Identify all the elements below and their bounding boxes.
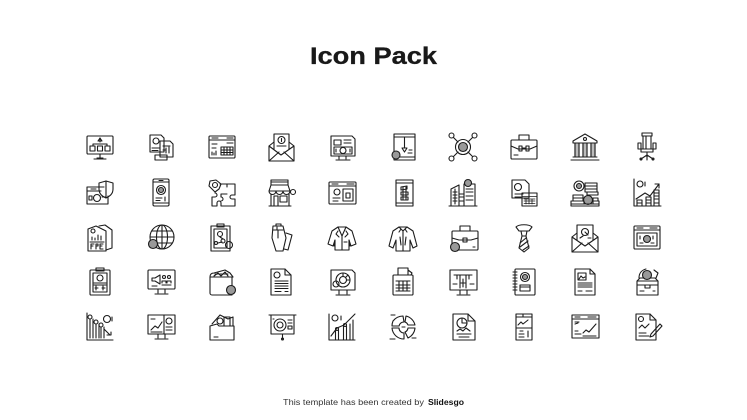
title: Icon Pack [310,43,438,70]
icon: necktie [516,225,532,252]
icon: puzzle with coin [209,180,235,206]
icon: folder with money [210,315,234,340]
icon: falling bar chart [87,313,113,340]
icon: document with image [575,269,595,295]
icon grid [87,133,662,340]
icon: shirt [389,227,417,251]
icon: open envelope with coin [269,134,294,161]
icon: circular pie diagram [390,315,416,339]
icon: clipboard with coins [211,224,232,251]
footer credit: Slidesgo [428,397,464,407]
icon: tablet with charts [516,314,532,340]
footer credit: This template has been created by [283,397,425,407]
icon: city buildings with coin [449,180,477,206]
icon: blazer [328,227,356,250]
icon: monitor with pie chart [331,270,355,295]
icon: browser with shield [87,181,113,204]
icon: monitor with newspaper [331,136,355,160]
icon: storefront [269,180,296,206]
icon: browser with line chart [572,315,599,338]
icon: trousers [272,224,292,251]
icon: phone with stacked cards [396,180,413,206]
icon: coin stacks [571,181,599,206]
icon: rising line chart with coin [329,314,355,340]
icon: briefcase [511,135,537,159]
icon: smartphone with coin [153,179,169,206]
icon: receipt calculator [393,268,413,295]
icon: notebook with coin [513,269,535,295]
icon: browser with coin and card [329,182,356,204]
icon: envelope with chart [572,225,598,252]
icon: price tags with chart [88,225,112,251]
icon: coin network [449,133,477,161]
icon: monitor with line chart [148,315,175,339]
icon: document with pencil [636,314,662,340]
icon: bank [571,134,599,160]
icon: box with coins [637,269,658,295]
icon: book with pen and coin [392,134,415,160]
icon: browser with charts [209,136,235,158]
icon: monitor with megaphone [148,270,175,294]
icon: monitor with ATM [450,270,477,295]
icon: office chair [638,133,656,160]
icon: invoice and calculator [512,180,537,206]
icon: monitor with org chart [87,136,113,159]
icon: presentation board [269,315,296,340]
icon: clipboard with coin [90,268,110,295]
icon: globe with coin [148,225,174,249]
icon: briefcase with coin [450,226,478,252]
icon: rising bar chart with coin [634,179,661,206]
icon: documents with coin [150,135,173,160]
icon: browser with banknote [634,226,660,249]
icon: wallet with money [210,270,236,295]
icon: document with pie chart [453,314,475,340]
icon: document with coin [271,269,291,295]
